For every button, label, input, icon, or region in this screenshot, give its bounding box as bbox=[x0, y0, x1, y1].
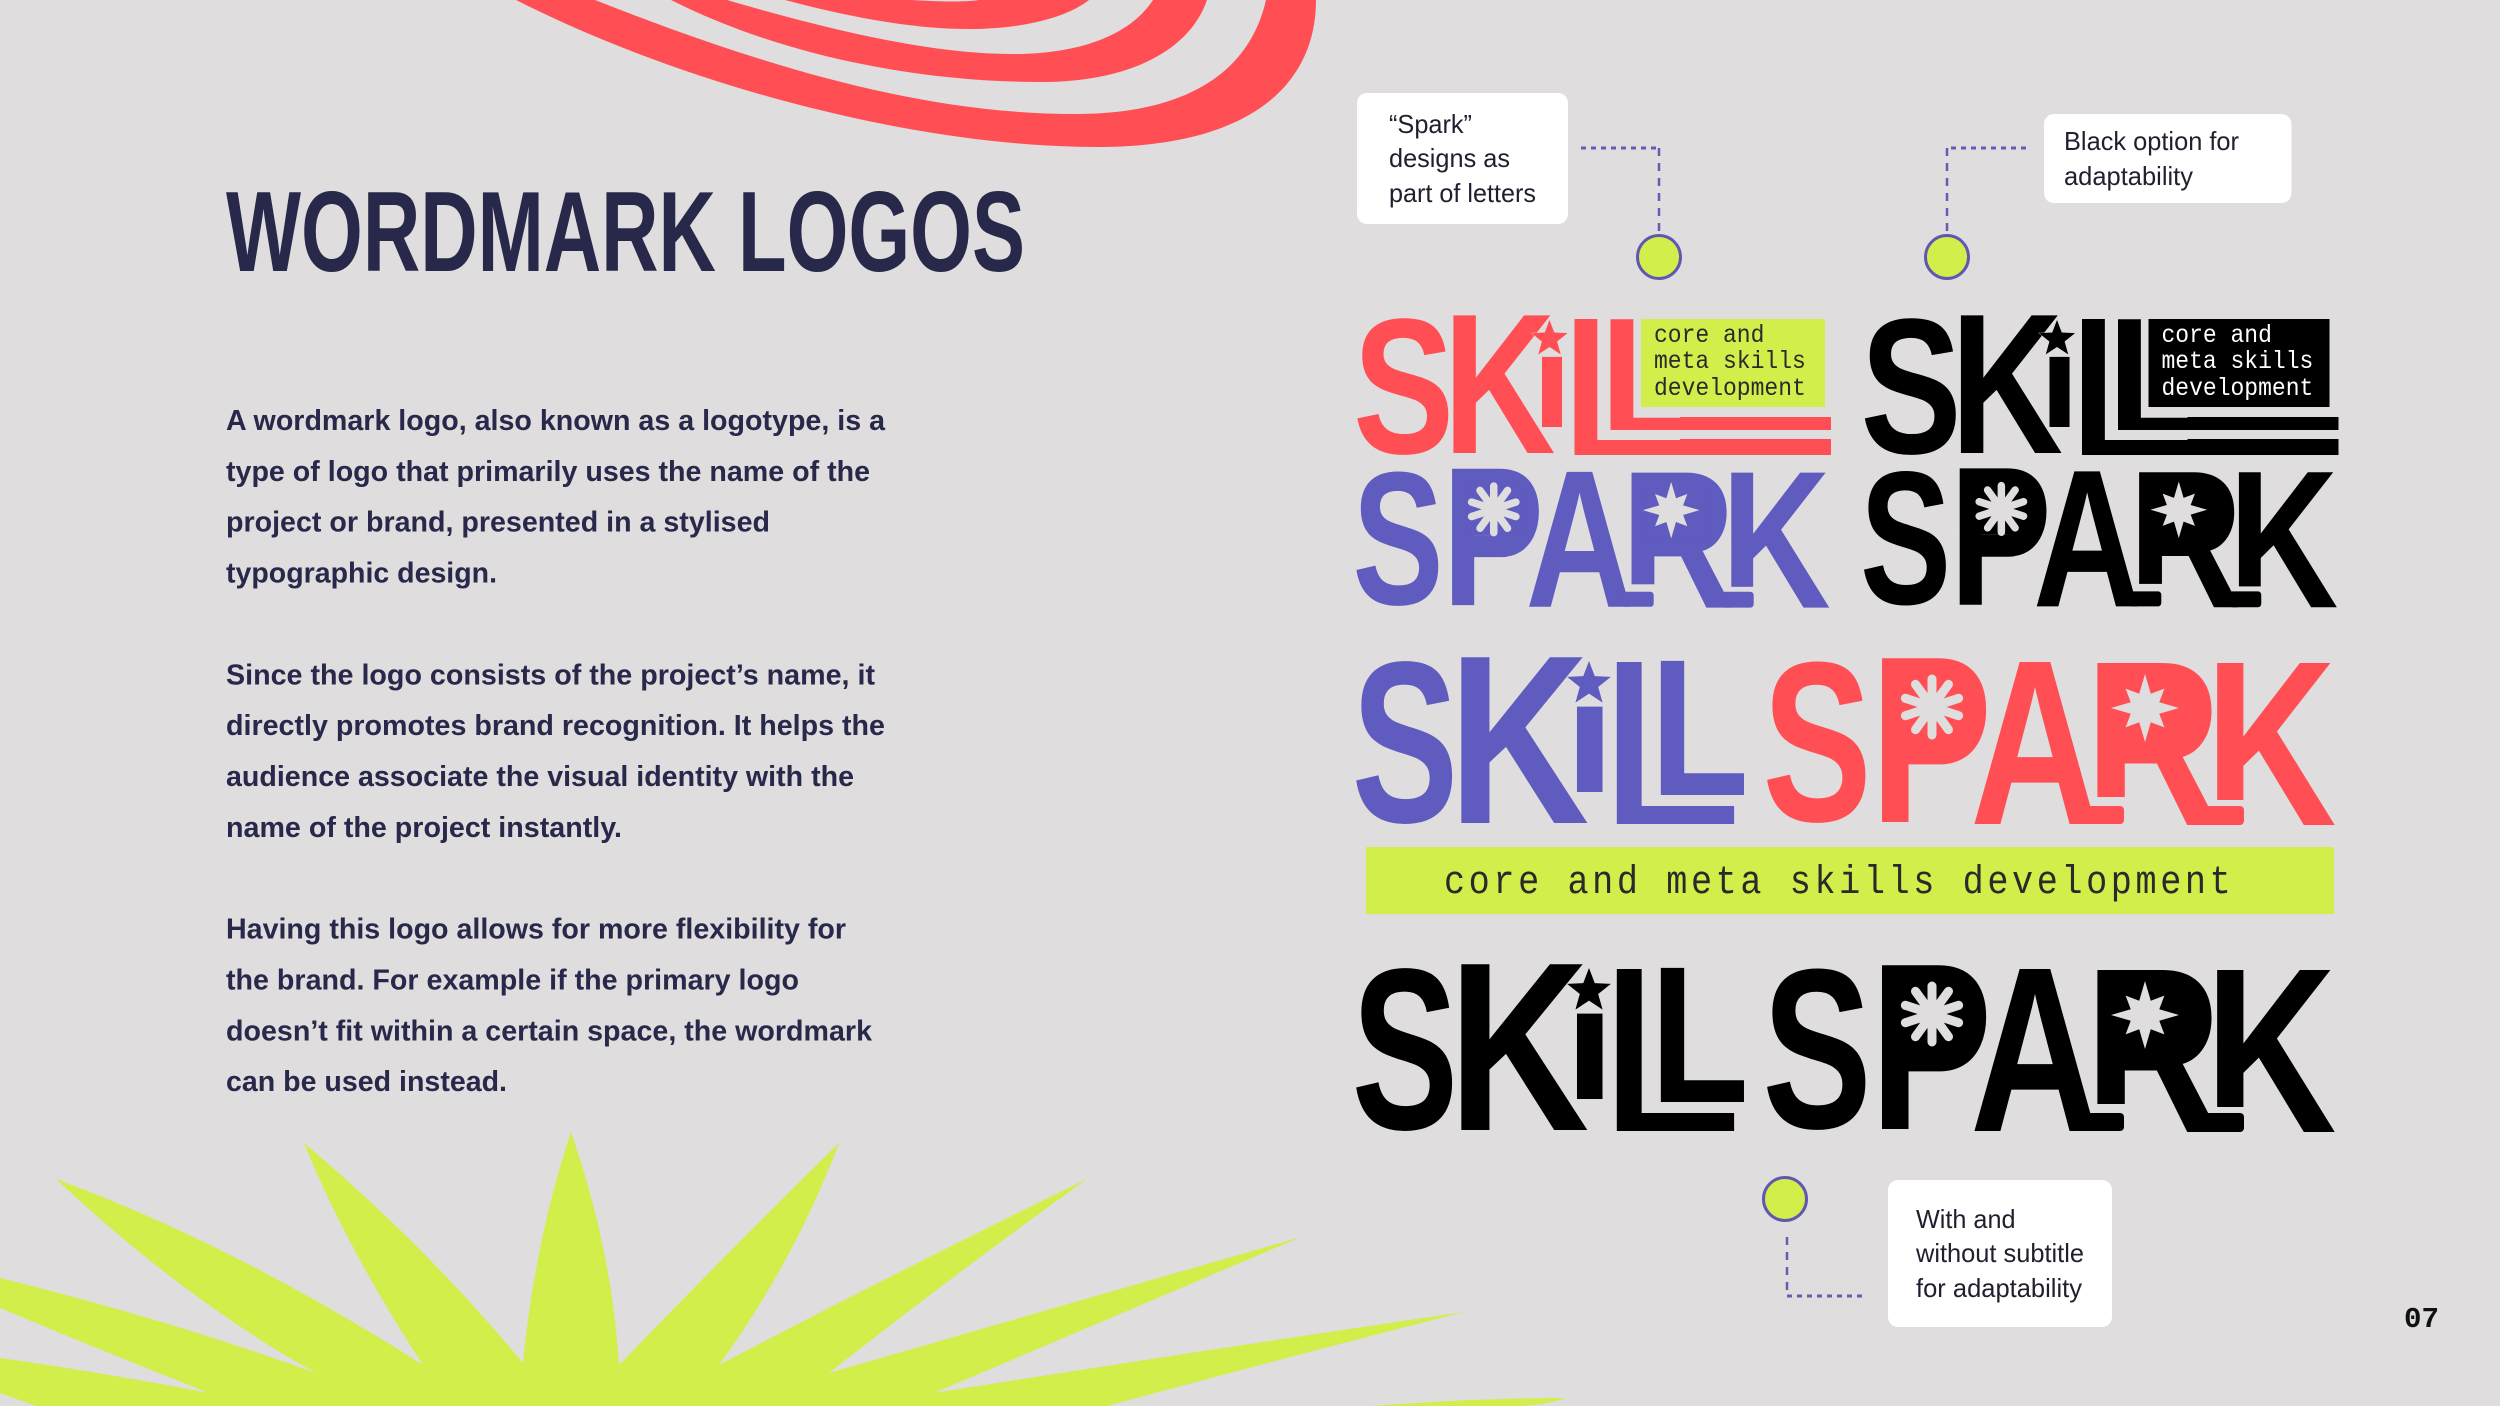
connector: subtitle callout to marker bbox=[1764, 1178, 1864, 1296]
logo: large purple SKILL: i bbox=[1564, 646, 1616, 826]
subtitle band bbox=[1366, 847, 2334, 914]
logo: black SKILL with black subtitle box: L bbox=[2062, 276, 2198, 498]
logo: large black SKILL bbox=[1356, 964, 1744, 1131]
page number: 07 bbox=[2404, 1303, 2439, 1336]
subtitle band: core and meta skills development bbox=[1444, 861, 2231, 906]
logo: black SKILL with black subtitle box bbox=[1864, 315, 2338, 455]
logo: red SKILL with lime subtitle box: L bbox=[1554, 276, 1691, 498]
logo: large black SKILL: L bbox=[1595, 919, 1743, 1182]
logo: large red SPARK bbox=[1762, 607, 2336, 876]
text block: definition paragraph: project or brand, presented in a stylised bbox=[226, 507, 770, 539]
logo: large black SPARK: R bbox=[2085, 920, 2222, 1183]
logo: red SKILL with lime subtitle box: meta skills bbox=[1654, 348, 1806, 376]
logo: black SKILL with black subtitle box: L bbox=[2098, 284, 2234, 464]
callout: spark designs: designs as bbox=[1389, 143, 1510, 173]
callout: with and without subtitle: without subtitle bbox=[1915, 1238, 2084, 1268]
logo: large black SKILL: K bbox=[1448, 913, 1589, 1182]
decorative red concentric arcs bbox=[516, 0, 1316, 147]
logo: black SPARK (top row): A bbox=[2033, 429, 2141, 648]
text block: brand recognition paragraph: name of the project instantly. bbox=[226, 812, 622, 844]
logo: purple SPARK: K bbox=[1721, 431, 1831, 650]
callout: spark designs bbox=[1357, 93, 1568, 224]
logo: red SKILL with lime subtitle box bbox=[1357, 315, 1831, 455]
logo: large black SPARK: A bbox=[1970, 919, 2100, 1182]
logo: purple SPARK: P bbox=[1442, 426, 1544, 648]
text block: definition paragraph: A wordmark logo, also known as a logotype, is a bbox=[226, 405, 886, 437]
logo: large black SPARK bbox=[1762, 914, 2336, 1183]
logo: large purple SKILL bbox=[1356, 657, 1744, 824]
logo: black SPARK (top row): R bbox=[2129, 430, 2243, 649]
logo: large black SPARK: S bbox=[1762, 922, 1872, 1177]
logo: red SKILL with lime subtitle box: L bbox=[1590, 284, 1727, 464]
logo: large red SPARK: S bbox=[1762, 615, 1872, 870]
logo: purple SPARK: S bbox=[1352, 433, 1444, 645]
connector: black option callout to marker bbox=[1926, 148, 2026, 278]
callout: black option: adaptability bbox=[2064, 161, 2193, 191]
logo: purple SPARK: R bbox=[1621, 430, 1735, 649]
text block: brand recognition paragraph: audience associate the visual identity with the bbox=[226, 761, 854, 793]
text block: definition paragraph bbox=[226, 405, 886, 590]
logo: black SKILL with black subtitle box: development bbox=[2162, 375, 2313, 403]
logo: large purple SKILL: S bbox=[1352, 614, 1458, 870]
logo: black SPARK (top row): S bbox=[1860, 433, 1951, 645]
logo: red SKILL with lime subtitle box: core and bbox=[1654, 322, 1764, 350]
logo: black SPARK (top row): K bbox=[2229, 430, 2338, 650]
logo: large black SKILL: S bbox=[1352, 921, 1458, 1177]
logo: red SKILL with lime subtitle box: development bbox=[1654, 375, 1806, 403]
callout: spark designs: part of letters bbox=[1389, 178, 1536, 208]
logo: large red SPARK: A bbox=[1970, 612, 2100, 875]
logo: large black SKILL: L bbox=[1650, 926, 1749, 1143]
connector: spark callout to marker bbox=[1581, 148, 1680, 278]
logo: black SPARK (top row): P bbox=[1949, 426, 2052, 647]
logo: black SKILL with black subtitle box: meta skills bbox=[2162, 348, 2313, 376]
logo: large purple SKILL: L bbox=[1595, 612, 1743, 875]
logo: large black SPARK: P bbox=[1870, 914, 1992, 1180]
decorative lime starburst bbox=[0, 1132, 1566, 1406]
logo: red SKILL with lime subtitle box: K bbox=[1443, 272, 1555, 495]
logo: black SKILL with black subtitle box: core and bbox=[2162, 322, 2272, 350]
logo: large purple SKILL: L bbox=[1650, 619, 1749, 836]
logo: red SKILL with lime subtitle box: S bbox=[1353, 278, 1454, 494]
text block: brand recognition paragraph bbox=[226, 659, 885, 844]
logo: red SKILL with lime subtitle box: i bbox=[1532, 307, 1572, 456]
logo: large red SPARK: K bbox=[2205, 611, 2336, 875]
logo: large red SPARK: R bbox=[2085, 613, 2222, 876]
text block: brand recognition paragraph: directly promotes brand recognition. It helps the bbox=[226, 710, 885, 742]
logo: black SKILL with black subtitle box: i bbox=[2039, 307, 2080, 456]
text block: definition paragraph: type of logo that primarily uses the name of the bbox=[226, 456, 870, 488]
logo: black SPARK (top row) bbox=[1860, 426, 2338, 650]
text block: flexibility paragraph: Having this logo allows for more flexibility for bbox=[226, 914, 846, 946]
callout: black option: Black option for bbox=[2064, 126, 2239, 156]
text block: flexibility paragraph: the brand. For example if the primary logo bbox=[226, 964, 799, 996]
text block: definition paragraph: typographic design. bbox=[226, 558, 497, 590]
logo: black SKILL with black subtitle box: S bbox=[1860, 278, 1962, 494]
text block: flexibility paragraph bbox=[226, 914, 873, 1098]
logo: black SKILL with black subtitle box: K bbox=[1950, 272, 2063, 495]
callout: with and without subtitle: With and bbox=[1916, 1204, 2016, 1234]
callout: with and without subtitle: for adaptability bbox=[1916, 1273, 2082, 1303]
callout: spark designs: “Spark” bbox=[1389, 109, 1472, 139]
text block: flexibility paragraph: doesn’t fit within a certain space, the wordmark bbox=[226, 1015, 873, 1047]
logo: large purple SKILL: K bbox=[1448, 606, 1589, 875]
callout: black option bbox=[2044, 114, 2292, 203]
logo: large black SPARK: K bbox=[2205, 918, 2336, 1182]
title: WORDMARK LOGOS bbox=[226, 169, 1025, 296]
logo: purple SPARK: A bbox=[1525, 429, 1634, 648]
logo: large red SPARK: P bbox=[1870, 607, 1992, 873]
text block: brand recognition paragraph: Since the logo consists of the project’s name, it bbox=[226, 659, 875, 691]
logo: large black SKILL: i bbox=[1564, 953, 1616, 1133]
logo: purple SPARK bbox=[1352, 426, 1831, 650]
text block: flexibility paragraph: can be used instead. bbox=[226, 1066, 507, 1098]
callout: with and without subtitle bbox=[1888, 1180, 2112, 1327]
